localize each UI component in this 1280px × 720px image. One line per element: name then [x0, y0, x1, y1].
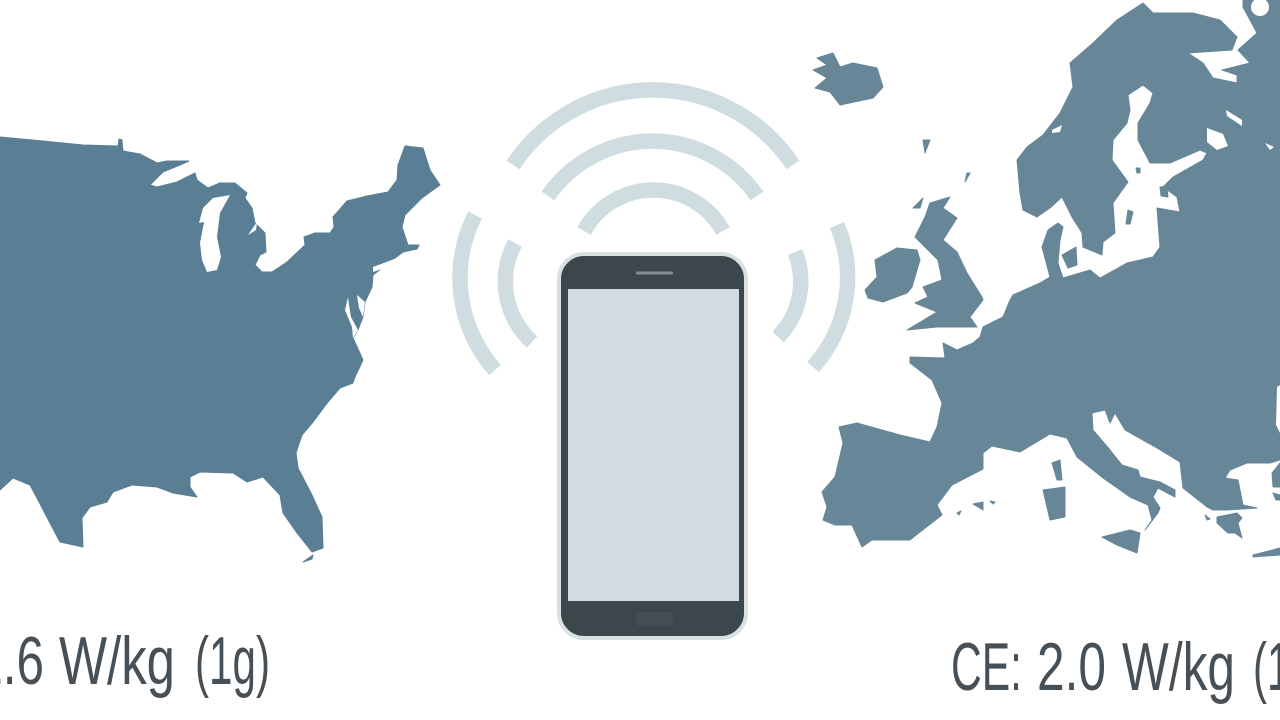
- smartphone: [559, 254, 746, 638]
- phone body: [559, 254, 746, 638]
- label: CE limit: CE:: [951, 629, 1022, 705]
- right waves: [813, 225, 848, 367]
- phone screen: [568, 289, 739, 601]
- Iceland: [813, 53, 883, 105]
- mainland Europe and Scandinavia: [822, 0, 1280, 547]
- Great Britain: [907, 197, 983, 330]
- left waves: [460, 215, 495, 370]
- Ireland: [865, 248, 920, 302]
- Greece: [1217, 513, 1242, 538]
- label: FCC limit: [0, 623, 270, 699]
- label: FCC limit: W/kg: [59, 623, 175, 699]
- label: CE limit: [951, 629, 1280, 705]
- label: CE limit: W/kg: [1122, 629, 1235, 705]
- signal waves: [460, 90, 848, 370]
- label: CE limit: 2.0: [1037, 629, 1106, 705]
- map: United States: [0, 137, 440, 562]
- home button: [636, 612, 673, 626]
- speaker: [636, 272, 673, 274]
- small islands: [913, 140, 1280, 557]
- top waves: [513, 90, 793, 165]
- seas and lakes: [1226, 110, 1242, 126]
- label: FCC limit: (1g): [195, 623, 270, 699]
- map: Europe: [813, 0, 1280, 557]
